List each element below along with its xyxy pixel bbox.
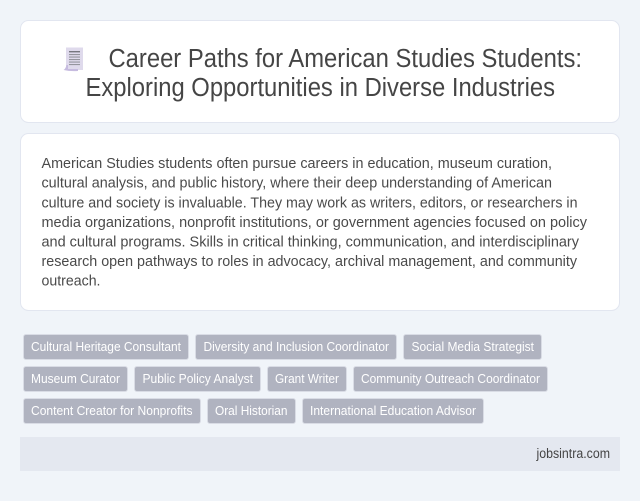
title bbox=[86, 45, 582, 102]
tag: Content Creator for Nonprofits: Content Creator for Nonprofits bbox=[31, 403, 193, 418]
tag: Diversity and Inclusion Coordinator: Diversity and Inclusion Coordinator bbox=[204, 339, 390, 354]
tag: Cultural Heritage Consultant bbox=[24, 334, 188, 360]
tag: Social Media Strategist: Social Media Strategist bbox=[412, 339, 534, 354]
text block: description: research open pathways to roles in advocacy, archival management, and community bbox=[42, 254, 578, 270]
tag: Content Creator for Nonprofits bbox=[24, 398, 200, 424]
text block: description: culture and society is invaluable. They may work as writers, editors, or researchers in bbox=[42, 196, 578, 212]
tag: Diversity and Inclusion Coordinator bbox=[196, 334, 396, 360]
text block: description: and cultural programs. Skills in critical thinking, communication, and interdisciplinary bbox=[42, 234, 580, 250]
tag: Cultural Heritage Consultant: Cultural Heritage Consultant bbox=[31, 339, 181, 354]
tag: Public Policy Analyst bbox=[134, 366, 260, 392]
tag: Community Outreach Coordinator: Community Outreach Coordinator bbox=[361, 371, 541, 386]
footer source text: jobsintra.com bbox=[536, 446, 610, 461]
tag: Social Media Strategist bbox=[404, 334, 542, 360]
tag: Grant Writer: Grant Writer bbox=[275, 371, 340, 386]
text block: description: media organizations, nonprofit institutions, or government agencies focused on policy bbox=[42, 215, 588, 231]
footer bar bbox=[20, 437, 620, 471]
tag: Oral Historian: Oral Historian bbox=[215, 403, 288, 418]
text block: description bbox=[42, 156, 588, 290]
panel: title card bbox=[20, 20, 620, 122]
tag: Oral Historian bbox=[208, 398, 296, 424]
tag: Museum Curator bbox=[24, 366, 128, 392]
tag: Public Policy Analyst: Public Policy Analyst bbox=[142, 371, 253, 386]
tag: Community Outreach Coordinator bbox=[354, 366, 548, 392]
tag: International Education Advisor: International Education Advisor bbox=[310, 403, 477, 418]
tag: Museum Curator: Museum Curator bbox=[31, 371, 121, 386]
text block: description: American Studies students often pursue careers in education, museum curation, bbox=[42, 156, 552, 172]
panel: description card bbox=[20, 134, 620, 310]
tag: Grant Writer bbox=[268, 366, 346, 392]
panel: career tags bbox=[24, 334, 548, 424]
tag: International Education Advisor bbox=[302, 398, 484, 424]
text block: description: cultural analysis, and public history, where their deep understanding of American bbox=[42, 176, 552, 192]
title: Exploring Opportunities in Diverse Industries bbox=[86, 74, 555, 102]
icon: document scroll bbox=[64, 48, 83, 71]
title: Career Paths for American Studies Students: bbox=[108, 45, 582, 73]
text block: description: outreach. bbox=[42, 274, 100, 290]
